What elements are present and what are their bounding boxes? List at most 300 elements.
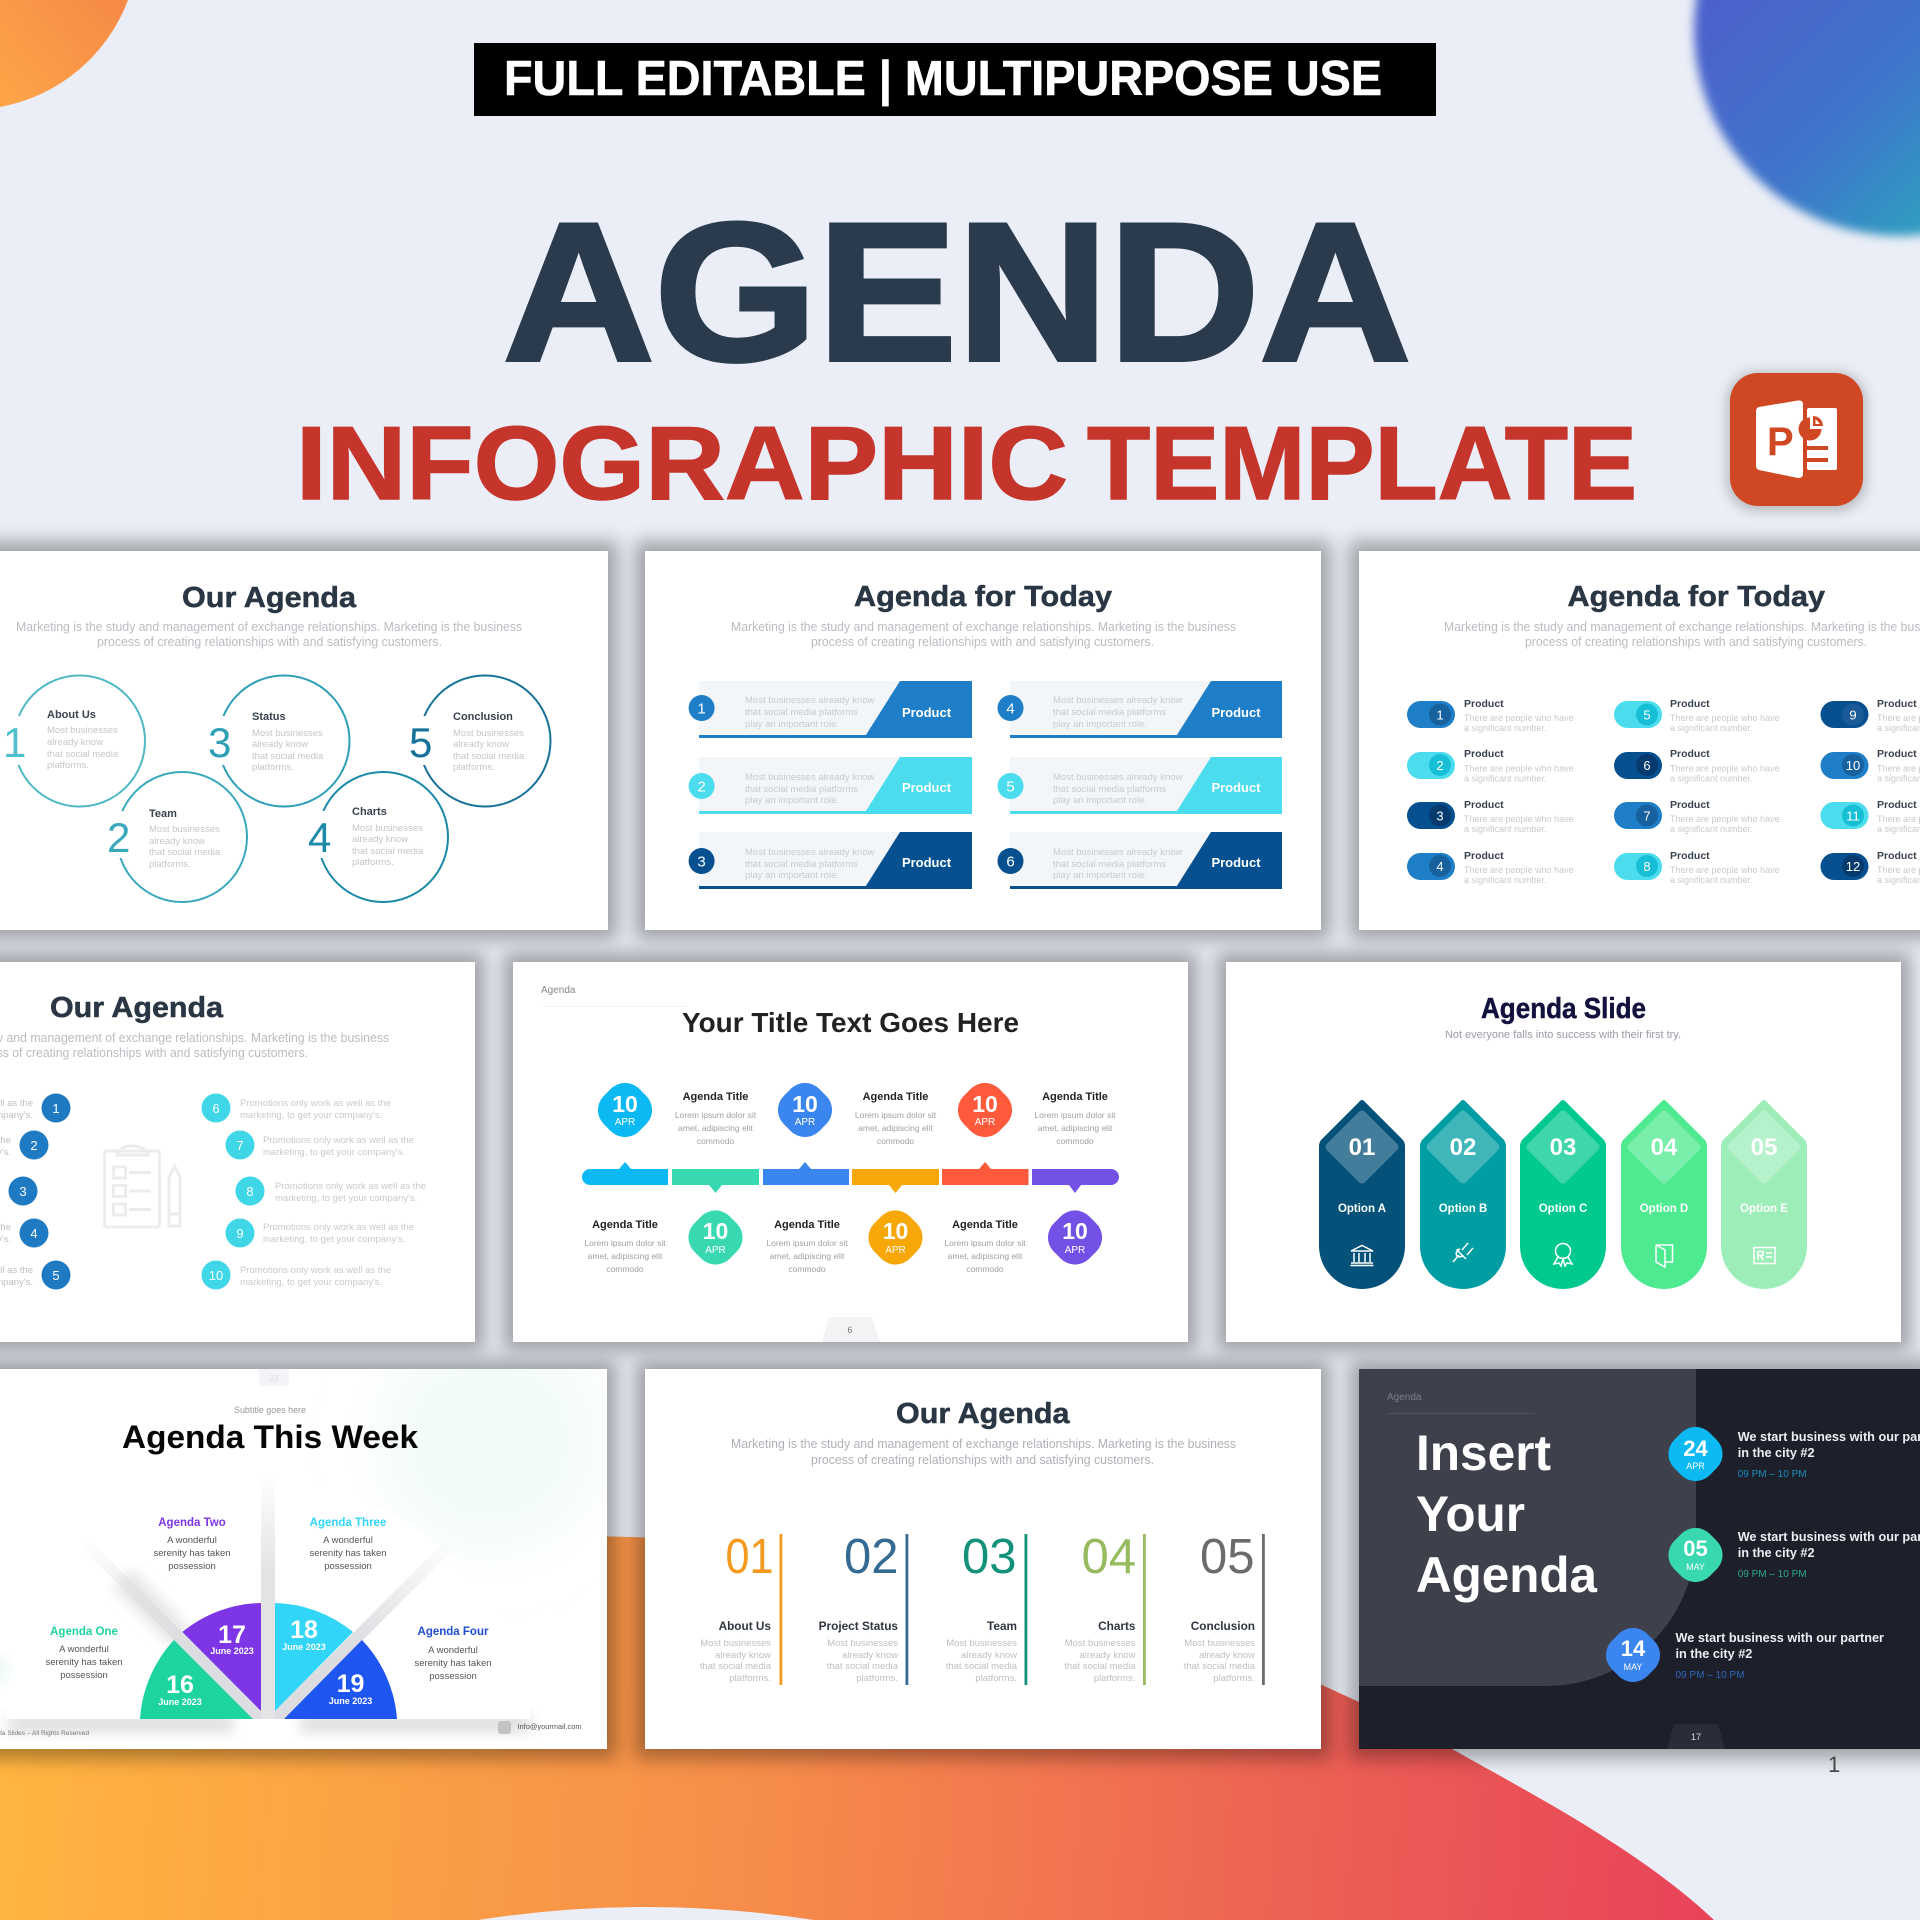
product bar 4: Product <box>1211 705 1261 720</box>
date badge: orange: APR <box>885 1245 906 1256</box>
product bar 3: play an important role. <box>745 870 839 881</box>
toggle column 2: Product <box>1670 698 1710 710</box>
product bar 1: 1 <box>697 700 706 718</box>
agenda four text: A wonderful <box>428 1645 478 1656</box>
product bar 4: 4 <box>1006 700 1015 718</box>
right numbered list <box>202 1094 426 1290</box>
lower agenda titles: commodo <box>788 1264 826 1274</box>
event 14 may: 14 <box>1621 1636 1646 1661</box>
circle item: team <box>149 808 221 870</box>
agenda three text: serenity has taken <box>309 1548 387 1559</box>
option card E: 05 <box>1751 1134 1777 1161</box>
circle numbers: 5 <box>409 719 432 766</box>
footer email: Info@yourmail.com <box>518 1722 582 1731</box>
right numbered list: Promotions only work as well as the <box>240 1265 391 1276</box>
toggle column 1: a significant number. <box>1464 824 1547 834</box>
panel: slide 3 agenda for today toggles <box>1359 551 1920 930</box>
circle item: conclusion: that social media <box>453 751 525 762</box>
page tab 6: 6 <box>847 1325 853 1335</box>
date badge: purple <box>1040 1202 1110 1273</box>
event 05 may: 09 PM – 10 PM <box>1738 1569 1807 1580</box>
right numbered list: marketing, to get your company's. <box>263 1234 405 1245</box>
lower agenda titles: amet, adipiscing elit <box>948 1251 1023 1261</box>
slide 2 heading: Agenda for Today <box>854 581 1112 613</box>
agenda two text: serenity has taken <box>153 1548 231 1559</box>
option card B: Option B <box>1439 1203 1487 1215</box>
icon: plug <box>1453 1243 1473 1262</box>
agenda three text <box>309 1517 387 1572</box>
slide 2 intro text: process of creating relationships with and satisfying customers. <box>811 634 1154 649</box>
sector 19 blue <box>284 1640 397 1719</box>
option card C: Option C <box>1539 1203 1587 1215</box>
option card B <box>1420 1100 1506 1289</box>
lower agenda titles: amet, adipiscing elit <box>770 1251 845 1261</box>
product bar 2: play an important role. <box>745 795 839 806</box>
agenda one text: A wonderful <box>59 1644 109 1655</box>
slide 2 intro text <box>731 619 1236 649</box>
right numbered list: 7 <box>236 1138 244 1153</box>
column 02: 02 <box>844 1530 898 1584</box>
product bar 3: that social media platforms <box>745 859 858 870</box>
background: orange gradient wave <box>0 1535 1714 1920</box>
slide 3 intro text <box>1444 619 1920 649</box>
lower agenda titles: commodo <box>606 1264 644 1274</box>
product bar 4: that social media platforms <box>1053 707 1166 718</box>
right numbered list: 6 <box>212 1101 220 1116</box>
event 24 apr: 24 <box>1683 1436 1708 1461</box>
circle numbers: 2 <box>107 814 130 861</box>
column 01: already know <box>715 1650 771 1661</box>
column 03 <box>946 1530 1027 1685</box>
lower agenda titles <box>584 1219 1026 1274</box>
toggle column 1: a significant number. <box>1464 774 1547 784</box>
event 14 may: in the city #2 <box>1676 1647 1752 1661</box>
circle item: charts: platforms. <box>352 857 394 868</box>
product bar 5: 5 <box>1006 778 1015 796</box>
sector 18 cyan <box>275 1603 353 1711</box>
agenda three text: possession <box>324 1561 372 1572</box>
option card A: Option A <box>1338 1203 1386 1215</box>
option card D: Option D <box>1640 1203 1688 1215</box>
toggle column 3: Product <box>1877 748 1917 760</box>
date badge: orange <box>860 1202 931 1273</box>
dark left panel <box>1359 1369 1696 1686</box>
right numbered list: Promotions only work as well as the <box>263 1222 414 1233</box>
right numbered list: 10 <box>209 1268 223 1283</box>
circle ring outlines <box>14 676 550 902</box>
upper agenda titles: commodo <box>1056 1136 1094 1146</box>
toggle column 2: 5 <box>1643 708 1651 722</box>
toggle column 1: 1 <box>1436 708 1444 722</box>
slide 4 intro text <box>0 1030 389 1060</box>
circle item: status: Status <box>252 711 286 723</box>
event 05 may: MAY <box>1686 1562 1705 1572</box>
product bar 2: Most businesses already know <box>745 772 875 783</box>
circle item: about us: that social media <box>47 749 119 760</box>
column 04 <box>1064 1530 1146 1685</box>
panel: slide 8 our agenda columns <box>645 1369 1321 1749</box>
circle item: conclusion: platforms. <box>453 762 495 773</box>
column 05: that social media <box>1184 1661 1256 1672</box>
agenda four text: possession <box>429 1671 477 1682</box>
toggle column 1: 2 <box>1436 758 1444 773</box>
toggle column 3 <box>1820 698 1920 885</box>
upper agenda titles: Lorem ipsum dolor sit <box>675 1110 757 1120</box>
agenda one text <box>45 1626 123 1681</box>
slide 2 intro text: Marketing is the study and management of exchange relationships. Marketing is the business <box>731 619 1236 634</box>
left numbered list: 3 <box>19 1184 27 1199</box>
slide 8 intro text <box>731 1436 1236 1467</box>
column 03: Most businesses <box>946 1638 1017 1649</box>
lower agenda titles: Lorem ipsum dolor sit <box>944 1238 1026 1248</box>
product bar 4: play an important role. <box>1053 719 1147 730</box>
toggle column 3: 12 <box>1846 859 1860 874</box>
product bar 3: 3 <box>697 854 706 870</box>
lower agenda titles: amet, adipiscing elit <box>588 1251 663 1261</box>
product bar 5 <box>998 757 1282 814</box>
toggle column 1: a significant number. <box>1464 875 1547 885</box>
product bar 6: Product <box>1211 855 1261 870</box>
option card A: 01 <box>1349 1134 1375 1161</box>
slide 5 heading: Your Title Text Goes Here <box>682 1007 1019 1038</box>
icon: powerpoint <box>1727 372 1866 511</box>
upper agenda titles: amet, adipiscing elit <box>858 1123 933 1133</box>
product bar 3 <box>689 832 972 889</box>
toggle column 1: a significant number. <box>1464 723 1547 733</box>
option card D: 04 <box>1651 1134 1678 1161</box>
icon: bank <box>1350 1246 1374 1266</box>
column 02: Most businesses <box>827 1638 898 1649</box>
lower agenda titles: commodo <box>966 1264 1004 1274</box>
agenda four text: serenity has taken <box>414 1658 492 1669</box>
slide drop shadows <box>0 541 1920 1759</box>
agenda one text: possession <box>60 1670 108 1681</box>
circle item: status: that social media <box>252 751 324 762</box>
date badge: orange: 10 <box>883 1218 908 1244</box>
panel: slide 9 dark insert your agenda <box>1359 1369 1920 1749</box>
toggle column 3: Product <box>1877 850 1917 862</box>
toggle column 2: There are people who have <box>1670 713 1780 723</box>
circle item: about us: platforms. <box>47 760 89 771</box>
toggle column 1: Product <box>1464 698 1504 710</box>
column 01: platforms. <box>729 1673 771 1684</box>
icon: id card <box>1754 1248 1775 1264</box>
panel: slide 6 agenda slide options <box>1226 962 1901 1342</box>
left numbered list: 4 <box>30 1226 38 1241</box>
circle item: status: Most businesses <box>252 728 323 739</box>
sector 18 cyan: 18 <box>290 1616 318 1644</box>
circle item: team: platforms. <box>149 859 191 870</box>
product bar 4: Most businesses already know <box>1053 695 1183 706</box>
slide 9 heading <box>1416 1425 1598 1603</box>
upper agenda titles: commodo <box>697 1136 734 1146</box>
date badge: cyan <box>590 1075 660 1145</box>
column 05: Most businesses <box>1184 1638 1255 1649</box>
product bar 2: Product <box>902 780 952 795</box>
slide 3 intro text: process of creating relationships with and satisfying customers. <box>1525 634 1867 649</box>
option card B: 02 <box>1450 1134 1476 1161</box>
page tab 17: 17 <box>1691 1732 1701 1742</box>
slide 5 tag: Agenda <box>541 985 576 996</box>
toggle column 2: 6 <box>1643 758 1651 773</box>
subtitle: infographic template: TEMPLATE <box>1087 406 1637 522</box>
column 04: that social media <box>1064 1661 1136 1672</box>
slide 6 heading: Agenda Slide <box>1481 993 1646 1025</box>
left numbered list: 1 <box>52 1101 60 1116</box>
upper agenda titles: Lorem ipsum dolor sit <box>1034 1110 1116 1120</box>
slide 6 subtitle: Not everyone falls into success with their first try. <box>1445 1029 1681 1041</box>
product bar 4 <box>998 681 1282 738</box>
agenda two text: possession <box>168 1561 216 1572</box>
toggle column 3: 10 <box>1846 758 1860 773</box>
right numbered list: Promotions only work as well as the <box>240 1098 391 1109</box>
date badge: green: APR <box>705 1245 726 1256</box>
column 03: already know <box>961 1650 1017 1661</box>
circle item: conclusion: already know <box>453 739 509 750</box>
panel: slide 1 our agenda circles <box>0 551 608 930</box>
toggle column 2: There are people who have <box>1670 814 1780 824</box>
upper agenda titles <box>675 1091 1116 1146</box>
circle item: status: platforms. <box>252 762 294 773</box>
lower agenda titles: Agenda Title <box>592 1219 658 1231</box>
slide 3 heading: Agenda for Today <box>1568 581 1825 613</box>
circle item: conclusion: Conclusion <box>453 711 513 723</box>
column 04: already know <box>1080 1650 1136 1661</box>
toggle column 1: There are people who have <box>1464 764 1574 774</box>
circle item: charts: Most businesses <box>352 823 423 834</box>
toggle column 2: There are people who have <box>1670 764 1780 774</box>
toggle column 2: 8 <box>1643 859 1651 874</box>
right numbered list: 9 <box>236 1226 244 1241</box>
column 05: Conclusion <box>1191 1619 1255 1633</box>
column 03: Team <box>987 1619 1017 1633</box>
product bar 6: that social media platforms <box>1053 859 1166 870</box>
banner: full editable: FULL EDITABLE | MULTIPURPOSE USE <box>504 52 1382 106</box>
panel: slide 5 timeline <box>513 962 1188 1342</box>
column 03: platforms. <box>975 1673 1017 1684</box>
slide 1 heading: Our Agenda <box>182 582 357 614</box>
column 02: that social media <box>827 1661 899 1672</box>
toggle column 2: There are people who have <box>1670 865 1780 875</box>
subtitle: infographic template: INFOGRAPHIC <box>296 406 1068 522</box>
product bar 6 <box>998 832 1282 889</box>
agenda three text: Agenda Three <box>310 1517 386 1529</box>
date badge: cyan: APR <box>615 1117 635 1128</box>
sector 17 purple: 17 <box>218 1621 246 1649</box>
toggle column 1: Product <box>1464 850 1504 862</box>
event 14 may <box>1598 1620 1884 1690</box>
circle item: status: already know <box>252 739 308 750</box>
sector 18 cyan: June 2023 <box>282 1642 326 1652</box>
footer email <box>498 1721 582 1734</box>
right numbered list: 8 <box>246 1184 254 1199</box>
right numbered list: marketing, to get your company's. <box>263 1147 405 1158</box>
sector 16 green <box>140 1640 253 1719</box>
upper agenda titles: commodo <box>877 1136 914 1146</box>
date badge: cyan: 10 <box>612 1091 638 1117</box>
product bar 5: play an important role. <box>1053 795 1147 806</box>
slide 9 heading: Your <box>1416 1486 1525 1542</box>
option card E: Option E <box>1740 1203 1788 1215</box>
slide 1 intro text: Marketing is the study and management of exchange relationships. Marketing is the business <box>16 619 522 634</box>
page tab 23: 23 <box>270 1374 279 1383</box>
toggle column 2: Product <box>1670 799 1710 811</box>
date badge: green <box>680 1202 751 1273</box>
column 01: Most businesses <box>700 1638 771 1649</box>
event 24 apr: APR <box>1686 1461 1705 1471</box>
column 01: About Us <box>719 1619 771 1633</box>
lower agenda titles: Agenda Title <box>952 1219 1018 1231</box>
date badge: purple: APR <box>1065 1245 1085 1256</box>
circle item: status <box>252 711 324 773</box>
soft mint glow <box>0 1330 600 1685</box>
toggle column 3: 11 <box>1846 808 1860 824</box>
slide 7 heading: Agenda This Week <box>122 1419 418 1455</box>
slide 8 heading: Our Agenda <box>896 1398 1070 1430</box>
panel: slide 7 agenda this week fan <box>0 1330 607 1749</box>
product bar 5: Most businesses already know <box>1053 772 1183 783</box>
background: blue corner blob <box>1694 0 1920 236</box>
event 05 may: 05 <box>1683 1536 1708 1561</box>
right numbered list: Promotions only work as well as the <box>275 1181 426 1192</box>
event 14 may: We start business with our partner <box>1676 1631 1884 1645</box>
product bar 2: that social media platforms <box>745 784 858 795</box>
slide 1 intro text <box>16 619 522 649</box>
column 04: platforms. <box>1094 1673 1136 1684</box>
product bar 3: Most businesses already know <box>745 847 875 858</box>
upper agenda titles: Lorem ipsum dolor sit <box>855 1110 937 1120</box>
circle item: charts <box>352 806 424 868</box>
column 02: platforms. <box>856 1673 898 1684</box>
page tab 17 <box>1667 1724 1725 1749</box>
circle item: about us: already know <box>47 737 103 748</box>
upper agenda titles: Agenda Title <box>683 1091 748 1103</box>
agenda four text: Agenda Four <box>418 1626 489 1638</box>
background: bottom curved cut-out <box>478 1907 814 1920</box>
column 01: that social media <box>700 1661 772 1672</box>
slide 9 heading: Insert <box>1416 1425 1551 1481</box>
event 05 may: in the city #2 <box>1738 1546 1815 1560</box>
column 03: 03 <box>962 1530 1016 1584</box>
slide 9 heading: Agenda <box>1416 1547 1598 1603</box>
sector 16 green: June 2023 <box>158 1697 202 1707</box>
product bar 6: play an important role. <box>1053 870 1147 881</box>
background: orange corner blob <box>0 0 128 107</box>
page tab 23 <box>259 1369 289 1386</box>
circle item: conclusion <box>453 711 525 773</box>
subtitle: infographic template <box>296 406 1637 522</box>
right numbered list: marketing, to get your company's. <box>240 1277 382 1288</box>
product bar 2: 2 <box>697 778 706 796</box>
date badge: blue <box>770 1075 840 1145</box>
toggle column 1: Product <box>1464 748 1504 760</box>
agenda four text <box>414 1626 492 1682</box>
upper agenda titles: Agenda Title <box>1042 1091 1108 1103</box>
toggle column 2: Product <box>1670 748 1710 760</box>
sector 19 blue: June 2023 <box>329 1696 372 1706</box>
circle item: team: Most businesses <box>149 824 220 835</box>
circle item: about us: About Us <box>47 709 96 721</box>
event 24 apr: 09 PM – 10 PM <box>1738 1469 1807 1480</box>
slide 8 intro text: process of creating relationships with and satisfying customers. <box>811 1452 1154 1467</box>
column 03: that social media <box>946 1661 1018 1672</box>
toggle column 2: a significant number. <box>1670 723 1753 733</box>
agenda two text <box>153 1517 231 1572</box>
column 04: Charts <box>1098 1619 1136 1633</box>
circle numbers: 1 <box>3 719 26 766</box>
option card E <box>1721 1100 1807 1289</box>
lower agenda titles: Lorem ipsum dolor sit <box>584 1238 666 1248</box>
icon: clipboard and pencil <box>104 1146 180 1227</box>
date badge: green: 10 <box>703 1218 728 1244</box>
toggle column 1: 4 <box>1436 859 1444 874</box>
slide 7 subtitle: Subtitle goes here <box>234 1405 306 1415</box>
circle item: about us <box>47 709 119 771</box>
circle item: team: already know <box>149 836 205 847</box>
sector 19 blue: 19 <box>337 1670 364 1698</box>
product bar 1: Most businesses already know <box>745 695 875 706</box>
circle item: about us: Most businesses <box>47 725 118 736</box>
toggle column 2: a significant number. <box>1670 824 1753 834</box>
toggle column 2 <box>1614 698 1780 885</box>
column 05: platforms. <box>1213 1673 1255 1684</box>
toggle column 2: 7 <box>1643 808 1651 824</box>
agenda one text: serenity has taken <box>45 1657 123 1668</box>
option card C: 03 <box>1550 1134 1576 1161</box>
sector 17 purple: June 2023 <box>210 1646 254 1656</box>
product bar 1: Product <box>902 705 952 720</box>
column 05: 05 <box>1200 1530 1254 1584</box>
column 01 <box>700 1530 782 1685</box>
icon: door <box>1656 1245 1672 1267</box>
agenda three text: A wonderful <box>323 1535 373 1546</box>
lower agenda titles: Agenda Title <box>774 1219 840 1231</box>
agenda two text: Agenda Two <box>158 1517 226 1529</box>
option card A <box>1319 1100 1405 1289</box>
circle item: charts: that social media <box>352 846 424 857</box>
column 05: already know <box>1199 1650 1255 1661</box>
slide 4 heading: Our Agenda <box>50 992 224 1024</box>
circle numbers: 3 <box>208 719 231 766</box>
icon: powerpoint: P <box>1767 420 1794 464</box>
circle numbers <box>0 716 435 861</box>
event 24 apr: in the city #2 <box>1738 1446 1815 1460</box>
sector 17 purple <box>182 1603 261 1711</box>
timeline bar <box>582 1162 1119 1193</box>
product bar 1: play an important role. <box>745 719 839 730</box>
toggle column 1: Product <box>1464 799 1504 811</box>
toggle column 3: Product <box>1877 698 1917 710</box>
slide 9 tag: Agenda <box>1387 1392 1422 1403</box>
fan background <box>6 1473 531 1734</box>
date badge: blue: 10 <box>792 1091 818 1117</box>
column 02: already know <box>842 1650 898 1661</box>
icon: ribbon <box>1554 1244 1572 1266</box>
event 14 may: 09 PM – 10 PM <box>1676 1670 1744 1681</box>
event 24 apr <box>1660 1419 1920 1489</box>
event 14 may: MAY <box>1624 1662 1642 1672</box>
date badge: red <box>950 1075 1020 1145</box>
right numbered list: Promotions only work as well as the <box>263 1135 414 1146</box>
date badge: red: 10 <box>972 1091 998 1117</box>
agenda one text: Agenda One <box>50 1626 118 1638</box>
toggle column 3: Product <box>1877 799 1917 811</box>
left numbered list <box>0 1094 70 1290</box>
circle item: charts: already know <box>352 834 408 845</box>
toggle column 1: 3 <box>1436 808 1444 824</box>
circle item: charts: Charts <box>352 806 387 818</box>
panel: slide 2 agenda for today product bars <box>645 551 1321 930</box>
